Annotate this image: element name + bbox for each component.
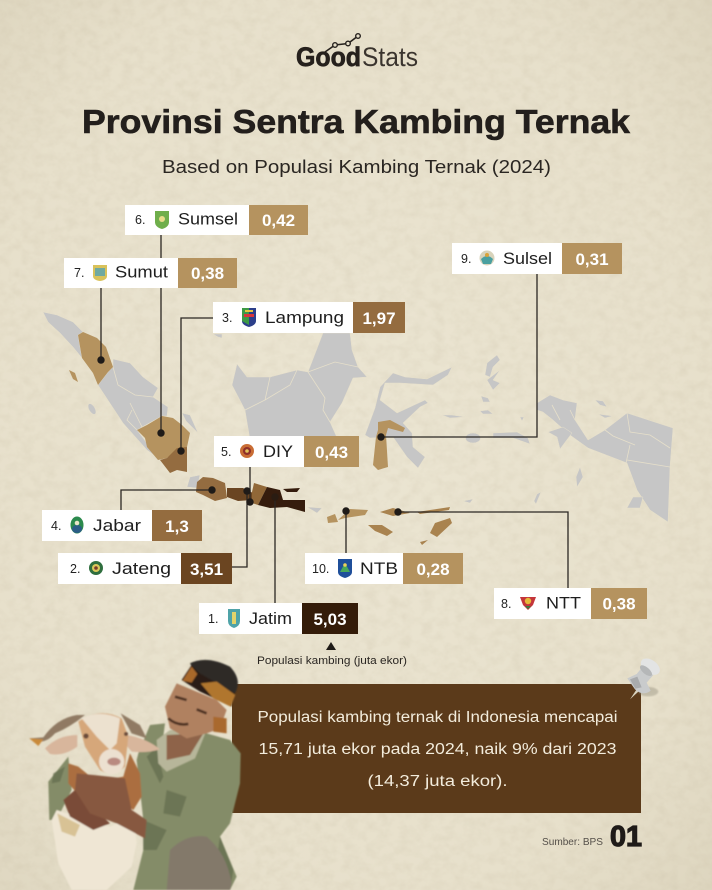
shirt and neck <box>157 730 207 772</box>
label: Jateng <box>58 553 232 584</box>
face <box>165 683 227 738</box>
label: Sumsel: 6. <box>135 213 145 227</box>
label: Sumut: Sumut <box>115 262 168 282</box>
gray provinces <box>43 312 673 522</box>
label: Lampung: 3. <box>222 311 232 325</box>
callout panel: Populasi kambing ternak di Indonesia mencapai <box>258 709 618 726</box>
highlighted: NTT <box>368 507 452 545</box>
label: Jatim: Jatim <box>249 609 292 628</box>
title: Provinsi Sentra Kambing Ternak <box>82 103 631 140</box>
highlighted: Jatim <box>258 487 305 512</box>
legend caption: Populasi kambing (juta ekor) <box>257 655 407 667</box>
callout panel: 15,71 juta ekor pada 2024, naik 9% dari 2023 <box>258 741 616 758</box>
label: Sulsel: 9. <box>461 252 471 266</box>
highlighted: Sulsel <box>373 420 405 470</box>
label: Lampung <box>213 302 405 333</box>
logo: GoodStats: Stats <box>362 42 418 72</box>
goat horns <box>29 715 85 742</box>
label: Jabar: 1,3 <box>165 517 189 536</box>
label: Jateng: Jateng <box>112 559 171 578</box>
subtitle: Based on Populasi Kambing Ternak (2024) <box>162 157 551 177</box>
logo: GoodStats <box>296 34 418 72</box>
label: NTB: NTB <box>360 559 398 578</box>
label: NTT: 8. <box>501 597 511 611</box>
label: Sumsel: 0,42 <box>262 211 295 230</box>
label: Sumut: 0,38 <box>191 264 224 283</box>
label: NTT: NTT <box>546 594 581 612</box>
connector dots <box>97 356 402 516</box>
label: Jateng: 2. <box>70 562 80 576</box>
province borders <box>113 362 670 467</box>
highlighted: NTB <box>327 509 368 523</box>
callout panel <box>232 684 641 813</box>
source: Sumber: BPS <box>542 836 603 848</box>
connector lines <box>101 235 568 603</box>
legend marker <box>326 642 336 650</box>
goat ears <box>45 735 77 755</box>
map of Indonesia <box>43 312 673 545</box>
label: Lampung: Lampung <box>265 308 344 327</box>
label: Jatim: 1. <box>208 612 218 626</box>
label: Sulsel <box>452 243 622 274</box>
label: Jabar <box>42 510 202 541</box>
label: Jabar: 4. <box>51 519 61 533</box>
callout panel: (14,37 juta ekor). <box>368 773 508 790</box>
jacket knee <box>167 836 232 890</box>
headband batik <box>182 665 235 707</box>
label: NTT <box>494 588 647 619</box>
label: Sulsel: Sulsel <box>503 249 552 268</box>
label: DIY: 5. <box>221 445 231 459</box>
icon: push pin <box>627 655 663 699</box>
photo: farmer holding goat <box>29 660 241 890</box>
label: Sumut: 7. <box>74 266 84 280</box>
highlighted: Lampung <box>160 447 187 473</box>
label: NTB <box>305 553 463 584</box>
label: Sumut <box>64 258 237 288</box>
label: NTB: 0,28 <box>416 560 450 579</box>
farmer hands <box>63 790 110 830</box>
label: Jabar: Jabar <box>93 516 141 535</box>
label: NTB: 10. <box>312 562 329 576</box>
goat head <box>78 713 128 773</box>
farmer jacket <box>48 723 241 890</box>
label: Sumsel <box>125 205 308 235</box>
label: DIY <box>214 436 359 467</box>
highlighted: DIY and east Java west part <box>252 483 267 505</box>
label: Jateng: 3,51 <box>190 560 223 579</box>
label: Lampung: 1,97 <box>362 309 396 328</box>
page number: 01 <box>610 821 642 853</box>
goat body <box>52 810 137 890</box>
hair <box>190 660 238 693</box>
highlighted: Sumsel <box>137 416 190 460</box>
label: Sulsel: 0,31 <box>575 250 609 269</box>
highlighted: Sumut <box>78 332 113 385</box>
label: Jatim: 5,03 <box>313 610 347 629</box>
goat neck <box>68 753 142 810</box>
label: NTT: 0,38 <box>602 594 636 614</box>
highlighted: Nias <box>69 370 78 382</box>
label: DIY: 0,43 <box>315 443 348 462</box>
jacket shadows <box>52 747 233 890</box>
highlighted: Jateng <box>227 488 253 501</box>
logo: GoodStats: Good <box>296 42 361 72</box>
highlighted: Jabar <box>196 477 227 501</box>
label: DIY: DIY <box>263 442 293 461</box>
label: Sumsel: Sumsel <box>178 210 238 228</box>
label: Jatim <box>199 603 358 634</box>
